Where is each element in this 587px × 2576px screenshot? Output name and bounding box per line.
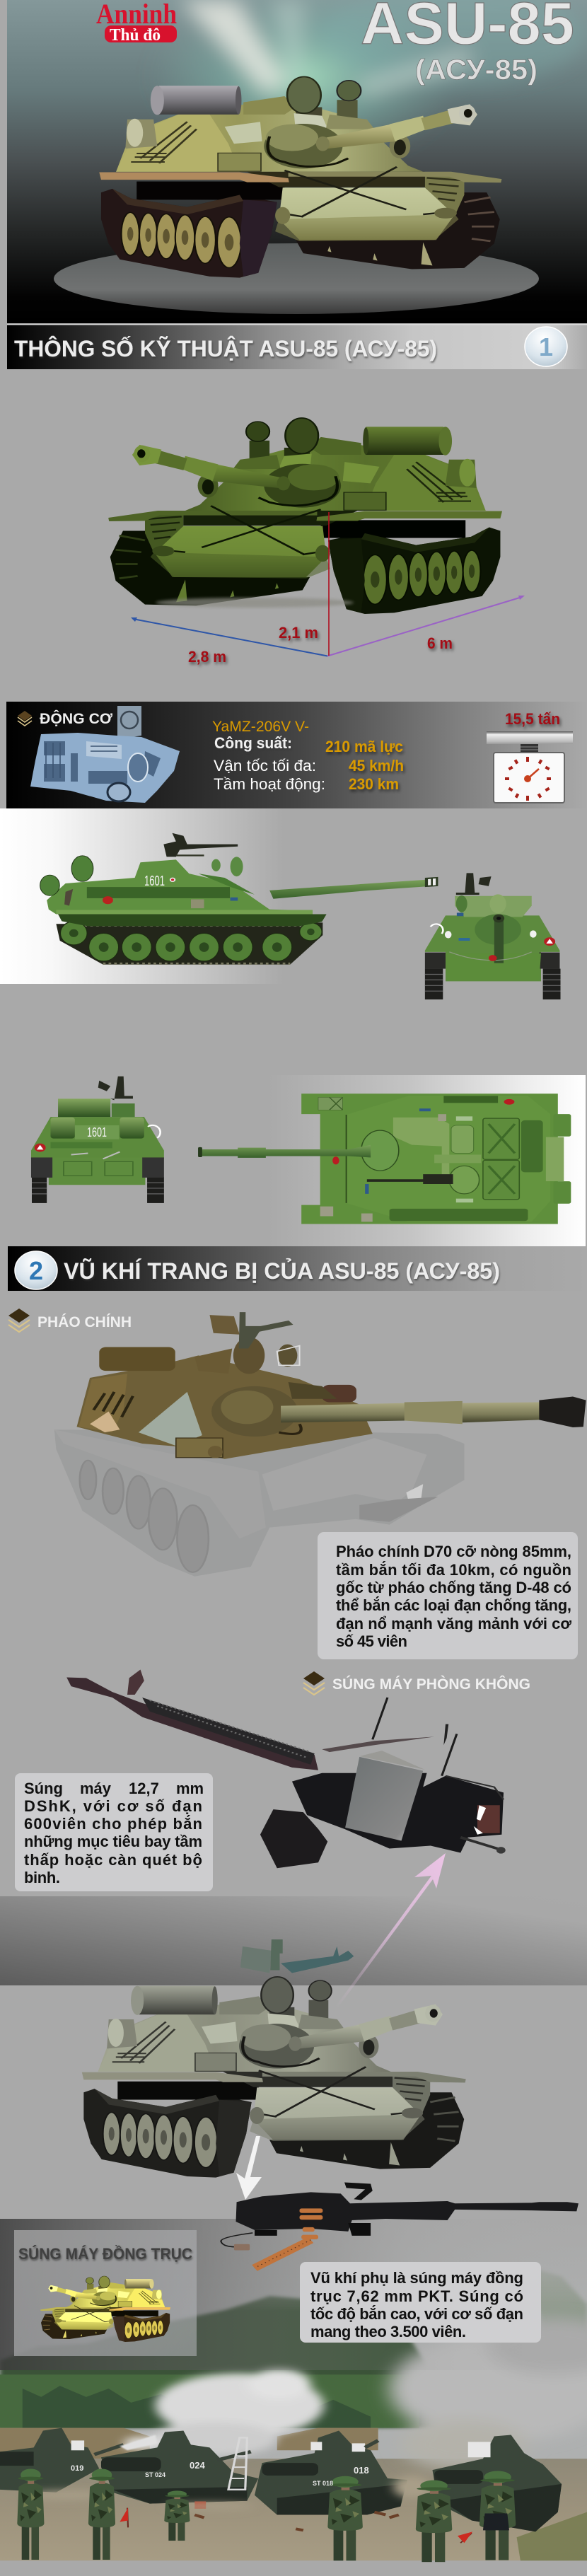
spec: speed: Vận tốc tối đa: xyxy=(214,757,316,774)
darker translucent band over photo xyxy=(0,2219,587,2370)
label: coaxial machine gun: SÚNG MÁY ĐỒNG TRỤC xyxy=(18,2245,192,2263)
subtitle: АСУ-85: (АСУ-85) xyxy=(415,54,537,86)
spec: range xyxy=(214,775,399,793)
subheading: anti-aircraft machine gun: SÚNG MÁY PHÒNG KHÔNG xyxy=(332,1676,530,1693)
tank: main gun highlighted xyxy=(54,1312,586,1577)
callout: DShK description: binh. xyxy=(24,1869,60,1886)
callout: main gun description: thể bắn các loại đạn chống tăng, xyxy=(336,1596,571,1614)
distant hill on right xyxy=(532,2268,587,2338)
badge 1: 1 xyxy=(539,332,553,361)
vehicle markings in photo: ST 018 xyxy=(313,2480,333,2487)
label: hull number on rear view: 1601 xyxy=(87,1125,107,1139)
callout: DShK description: thấp hoặc càn quét bộ xyxy=(24,1851,202,1869)
blueprint: top view xyxy=(198,1093,571,1224)
callout: DShK description: 12,7 xyxy=(129,1780,159,1797)
vehicle markings in photo: 019 xyxy=(71,2464,83,2473)
dimension line: height xyxy=(328,512,330,656)
fog overlay xyxy=(0,2219,587,2311)
grey gradient band xyxy=(0,1896,587,1985)
spec: engine model: YaMZ-206V V- xyxy=(212,719,309,735)
callout: DShK description: 600viên cho phép bắn xyxy=(24,1815,202,1833)
callout: main gun description: đạn nổ mạnh văng mảnh với cơ xyxy=(336,1615,571,1632)
spec: range: Tầm hoạt động: xyxy=(214,775,325,793)
callout: main gun description xyxy=(318,1532,578,1659)
spec: power: Công suất: xyxy=(214,734,292,752)
light glow behind tank xyxy=(149,0,587,170)
ground xyxy=(0,2459,587,2560)
icon: scale xyxy=(487,731,573,803)
vehicle markings in photo: ST 024 xyxy=(145,2471,165,2478)
soldiers xyxy=(17,2468,44,2560)
earth bank xyxy=(0,2428,378,2459)
callout: DShK description xyxy=(15,1773,213,1891)
spec: power: 210 mã lực xyxy=(325,738,403,755)
panel: hero header xyxy=(7,0,587,323)
arrow: pink pointing to machine gun xyxy=(336,1853,446,2007)
bottom photo: firing exercise xyxy=(0,2219,587,2562)
callout: DShK description: DShK, với cơ số đạn xyxy=(24,1797,202,1815)
callout: DShK description: máy xyxy=(80,1780,112,1797)
tank photo in green xyxy=(108,418,502,614)
callout: coaxial gun description: tốc độ bắn cao, với cơ số đạn xyxy=(310,2305,523,2323)
subheading: main gun: PHÁO CHÍNH xyxy=(37,1314,132,1330)
label: height: 2,1 m xyxy=(279,624,318,642)
PKT coaxial machine gun xyxy=(221,2182,579,2268)
icon: chevrons anti-aircraft gun xyxy=(303,1671,325,1695)
spec: weight: 15,5 tấn xyxy=(505,710,560,728)
callout: coaxial gun description: mang theo 3.500 viên. xyxy=(310,2323,466,2340)
spec: range: 230 km xyxy=(349,775,399,793)
white arrow pointing to coaxial gun xyxy=(236,2136,262,2200)
DShK machine gun xyxy=(66,1669,506,1868)
heading text: VŨ KHÍ TRANG BỊ CỦA ASU-85 (АСУ-85) xyxy=(64,1258,500,1284)
heading bar: technical specifications xyxy=(7,324,587,369)
badge 2: 2 xyxy=(29,1256,43,1285)
heading: engine: ĐỘNG CƠ xyxy=(40,710,112,727)
hero background gradient xyxy=(7,0,587,323)
logo: An ninh Thủ đô xyxy=(96,0,177,45)
machine gun on tank xyxy=(240,1939,354,1973)
smoke xyxy=(390,2319,587,2470)
platform ellipse xyxy=(54,243,539,314)
panel: engine and weight xyxy=(6,702,587,808)
panel: white fades behind blueprints xyxy=(0,808,586,1251)
vehicle markings in photo: 018 xyxy=(354,2465,369,2476)
blueprint: side view xyxy=(40,833,438,965)
label: length: 6 m xyxy=(427,634,453,652)
dimension line: width xyxy=(131,617,327,656)
tank photo xyxy=(82,1977,466,2178)
callout: DShK description: những mục tiêu bay tầm xyxy=(24,1833,202,1850)
engine illustration xyxy=(30,706,180,803)
blueprint: rear view xyxy=(31,1077,164,1203)
tank photo xyxy=(99,76,501,278)
ground shadow xyxy=(156,598,354,608)
icon: chevrons main gun xyxy=(8,1309,30,1332)
callout: coaxial gun description: Vũ khí phụ là súng máy đồng xyxy=(310,2269,523,2287)
tanks in photo xyxy=(0,2428,562,2531)
callout: coaxial gun description xyxy=(300,2262,541,2343)
heading text: THÔNG SỐ KỸ THUẬT ASU-85 (АСУ-85) xyxy=(14,336,437,361)
label: width: 2,8 m xyxy=(188,648,226,666)
ammo belt xyxy=(300,2208,322,2239)
blueprint: front view xyxy=(425,873,561,999)
panel: dimensions xyxy=(108,418,525,666)
callout: coaxial gun description: trục 7,62 mm PKT. Súng có xyxy=(310,2287,523,2305)
panel: coaxial gun inset xyxy=(14,2230,197,2356)
spec: speed: 45 km/h xyxy=(349,757,404,774)
forest xyxy=(0,2296,464,2428)
dimension line: length xyxy=(327,596,525,656)
tank with machine gun xyxy=(82,1939,466,2178)
callout: main gun description: Pháo chính D70 cỡ nòng 85mm, xyxy=(336,1543,571,1560)
mini tank xyxy=(40,2276,170,2342)
badge 2 xyxy=(15,1251,57,1289)
vehicle markings in photo xyxy=(71,2460,369,2487)
spec: speed xyxy=(214,757,404,774)
callout: main gun description: tầm bắn tối đa 10km, có nguồn xyxy=(336,1561,571,1579)
spec: power xyxy=(214,734,403,755)
icon: chevrons xyxy=(18,711,32,726)
callout: DShK description: Súng xyxy=(24,1780,63,1797)
dust at tank bases xyxy=(26,2476,431,2510)
label: hull number on side view: 1601 xyxy=(144,874,165,889)
callout: DShK description: mm xyxy=(176,1780,204,1797)
callout: main gun description: số 45 viên xyxy=(336,1632,407,1650)
callout: main gun description: gốc từ pháo chống tăng D-48 có xyxy=(336,1579,571,1596)
heading bar: weapons xyxy=(8,1246,587,1291)
vehicle markings in photo: 024 xyxy=(190,2460,205,2471)
logo: An ninh Thủ đô: Thủ đô xyxy=(110,26,161,45)
badge 1 xyxy=(525,327,567,366)
